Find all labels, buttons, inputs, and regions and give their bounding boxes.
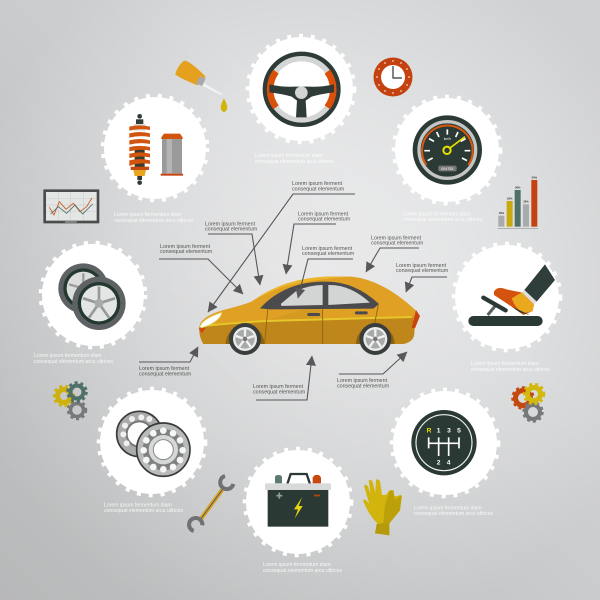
panel: pedal gear	[454, 244, 560, 350]
icon: gear shift knob: 2	[437, 460, 441, 467]
caption: tires: Lorem ipsum fermentum diam	[34, 353, 102, 359]
caption: steering: Lorem ipsum fermentum diam	[255, 153, 323, 159]
panel: gear shift gear	[392, 390, 498, 496]
icon: battery	[265, 474, 331, 527]
lights	[200, 313, 222, 328]
callout: rear roof: consequat elementum	[371, 240, 424, 246]
callout: trunk	[396, 263, 449, 292]
car body	[199, 277, 416, 344]
windows	[260, 282, 379, 309]
wheels	[229, 323, 261, 355]
icon: gear shift knob: 5	[457, 428, 461, 435]
caption: speedometer: consequat elementum arcu ultrices	[403, 217, 482, 223]
caption: gear shift	[414, 506, 493, 517]
icon: gear shift knob	[411, 410, 477, 475]
panel: shock absorber gear	[102, 96, 208, 200]
callout: front bumper	[139, 347, 198, 378]
callout: roof	[286, 212, 351, 274]
caption: battery: consequat elementum arcu ultrices	[263, 568, 342, 574]
icon: gloves	[363, 479, 402, 535]
callout: window: Lorem ipsum ferment	[302, 246, 353, 252]
icon: steering wheel	[265, 54, 338, 125]
icon: tires	[58, 263, 126, 330]
callout: top long: Lorem ipsum ferment	[292, 181, 343, 187]
icon: speedometer	[413, 115, 482, 185]
callout: hood: Lorem ipsum ferment	[205, 222, 256, 228]
icon: gear shift knob: 4	[447, 460, 451, 467]
icon: ball bearings	[117, 411, 190, 476]
icon: speedometer: km/h	[444, 137, 451, 141]
caption: pedal: consequat elementum arcu ultrices	[471, 367, 550, 373]
caption: shock absorber	[114, 212, 193, 224]
icon: small gears left	[54, 382, 86, 419]
callout: bottom center: consequat elementum	[253, 390, 306, 396]
callout: front left: Lorem ipsum ferment	[160, 244, 211, 250]
caption: shock absorber: consequat elementum arcu ultrices	[114, 218, 193, 224]
door lines and handles	[265, 305, 378, 344]
bar chart: 18%	[499, 211, 505, 215]
bar chart: 36%	[515, 185, 521, 189]
callout: roof: Lorem ipsum ferment	[298, 212, 349, 218]
callout: hood: consequat elementum	[205, 226, 258, 232]
callout: rear wheel	[337, 352, 407, 390]
caption: shock absorber: Lorem ipsum fermentum diam	[114, 212, 182, 218]
callout: window	[298, 246, 355, 298]
callout: rear roof	[366, 236, 424, 272]
caption: speedometer	[403, 212, 482, 223]
callout: front left: consequat elementum	[160, 249, 213, 255]
callout: front bumper: consequat elementum	[139, 372, 192, 378]
panel: bearings gear	[98, 388, 206, 496]
caption: steering: consequat elementum arcu ultrices	[255, 159, 334, 165]
caption: pedal	[471, 361, 550, 373]
callout: bottom center	[253, 356, 312, 400]
bar chart	[498, 175, 538, 229]
callout: trunk: consequat elementum	[396, 268, 449, 274]
callout: roof: consequat elementum	[298, 216, 351, 222]
callout: bottom center: Lorem ipsum ferment	[253, 384, 304, 390]
callout: rear wheel: consequat elementum	[337, 384, 390, 390]
icon: foot on pedal	[468, 264, 555, 326]
icon: gear shift knob: 3	[447, 428, 451, 435]
icon: oil can	[175, 61, 227, 112]
car	[199, 277, 420, 355]
callout: front left	[159, 244, 243, 294]
icon: speedometer: 004783	[441, 167, 453, 171]
caption: bearings: Lorem ipsum fermentum diam	[104, 502, 172, 508]
icon: monitor chart	[43, 189, 99, 223]
callout: window: consequat elementum	[302, 251, 355, 257]
icon: clock	[374, 58, 412, 96]
icon: shock absorber and filter	[129, 114, 183, 185]
caption: bearings	[104, 502, 183, 514]
callout: trunk: Lorem ipsum ferment	[396, 263, 447, 269]
callout: top long	[208, 181, 355, 312]
caption: gear shift: consequat elementum arcu ultrices	[414, 511, 493, 517]
caption: tires	[34, 353, 113, 365]
caption: battery: Lorem ipsum fermentum diam	[263, 562, 331, 568]
callout: rear roof: Lorem ipsum ferment	[371, 236, 422, 242]
caption: tires: consequat elementum arcu ultrices	[34, 359, 113, 365]
caption: bearings: consequat elementum arcu ultrices	[104, 508, 183, 514]
panel: tires gear	[40, 242, 146, 348]
bar chart: 50%	[532, 175, 538, 179]
icon: wrench	[189, 476, 233, 531]
callout: rear wheel: Lorem ipsum ferment	[337, 378, 388, 384]
callout: hood	[205, 222, 260, 285]
icon: gear shift knob: R	[427, 428, 432, 435]
panel: steering wheel gear	[248, 36, 354, 142]
caption: battery	[263, 562, 342, 574]
bar chart: 29%	[507, 197, 513, 201]
caption: speedometer: Lorem ipsum fermentum diam	[403, 212, 471, 218]
icon: gear shift knob: 1	[437, 428, 441, 435]
panel: battery gear	[244, 448, 352, 556]
caption: gear shift: Lorem ipsum fermentum diam	[414, 506, 482, 512]
callout: top long: consequat elementum	[292, 186, 345, 192]
icon: small gears right	[512, 384, 544, 422]
callout: front bumper: Lorem ipsum ferment	[139, 366, 190, 372]
bar chart: 26%	[523, 200, 529, 204]
panel: speedometer gear	[394, 96, 500, 204]
wheel arches	[226, 325, 264, 344]
caption: pedal: Lorem ipsum fermentum diam	[471, 361, 539, 367]
caption: steering	[255, 153, 334, 165]
